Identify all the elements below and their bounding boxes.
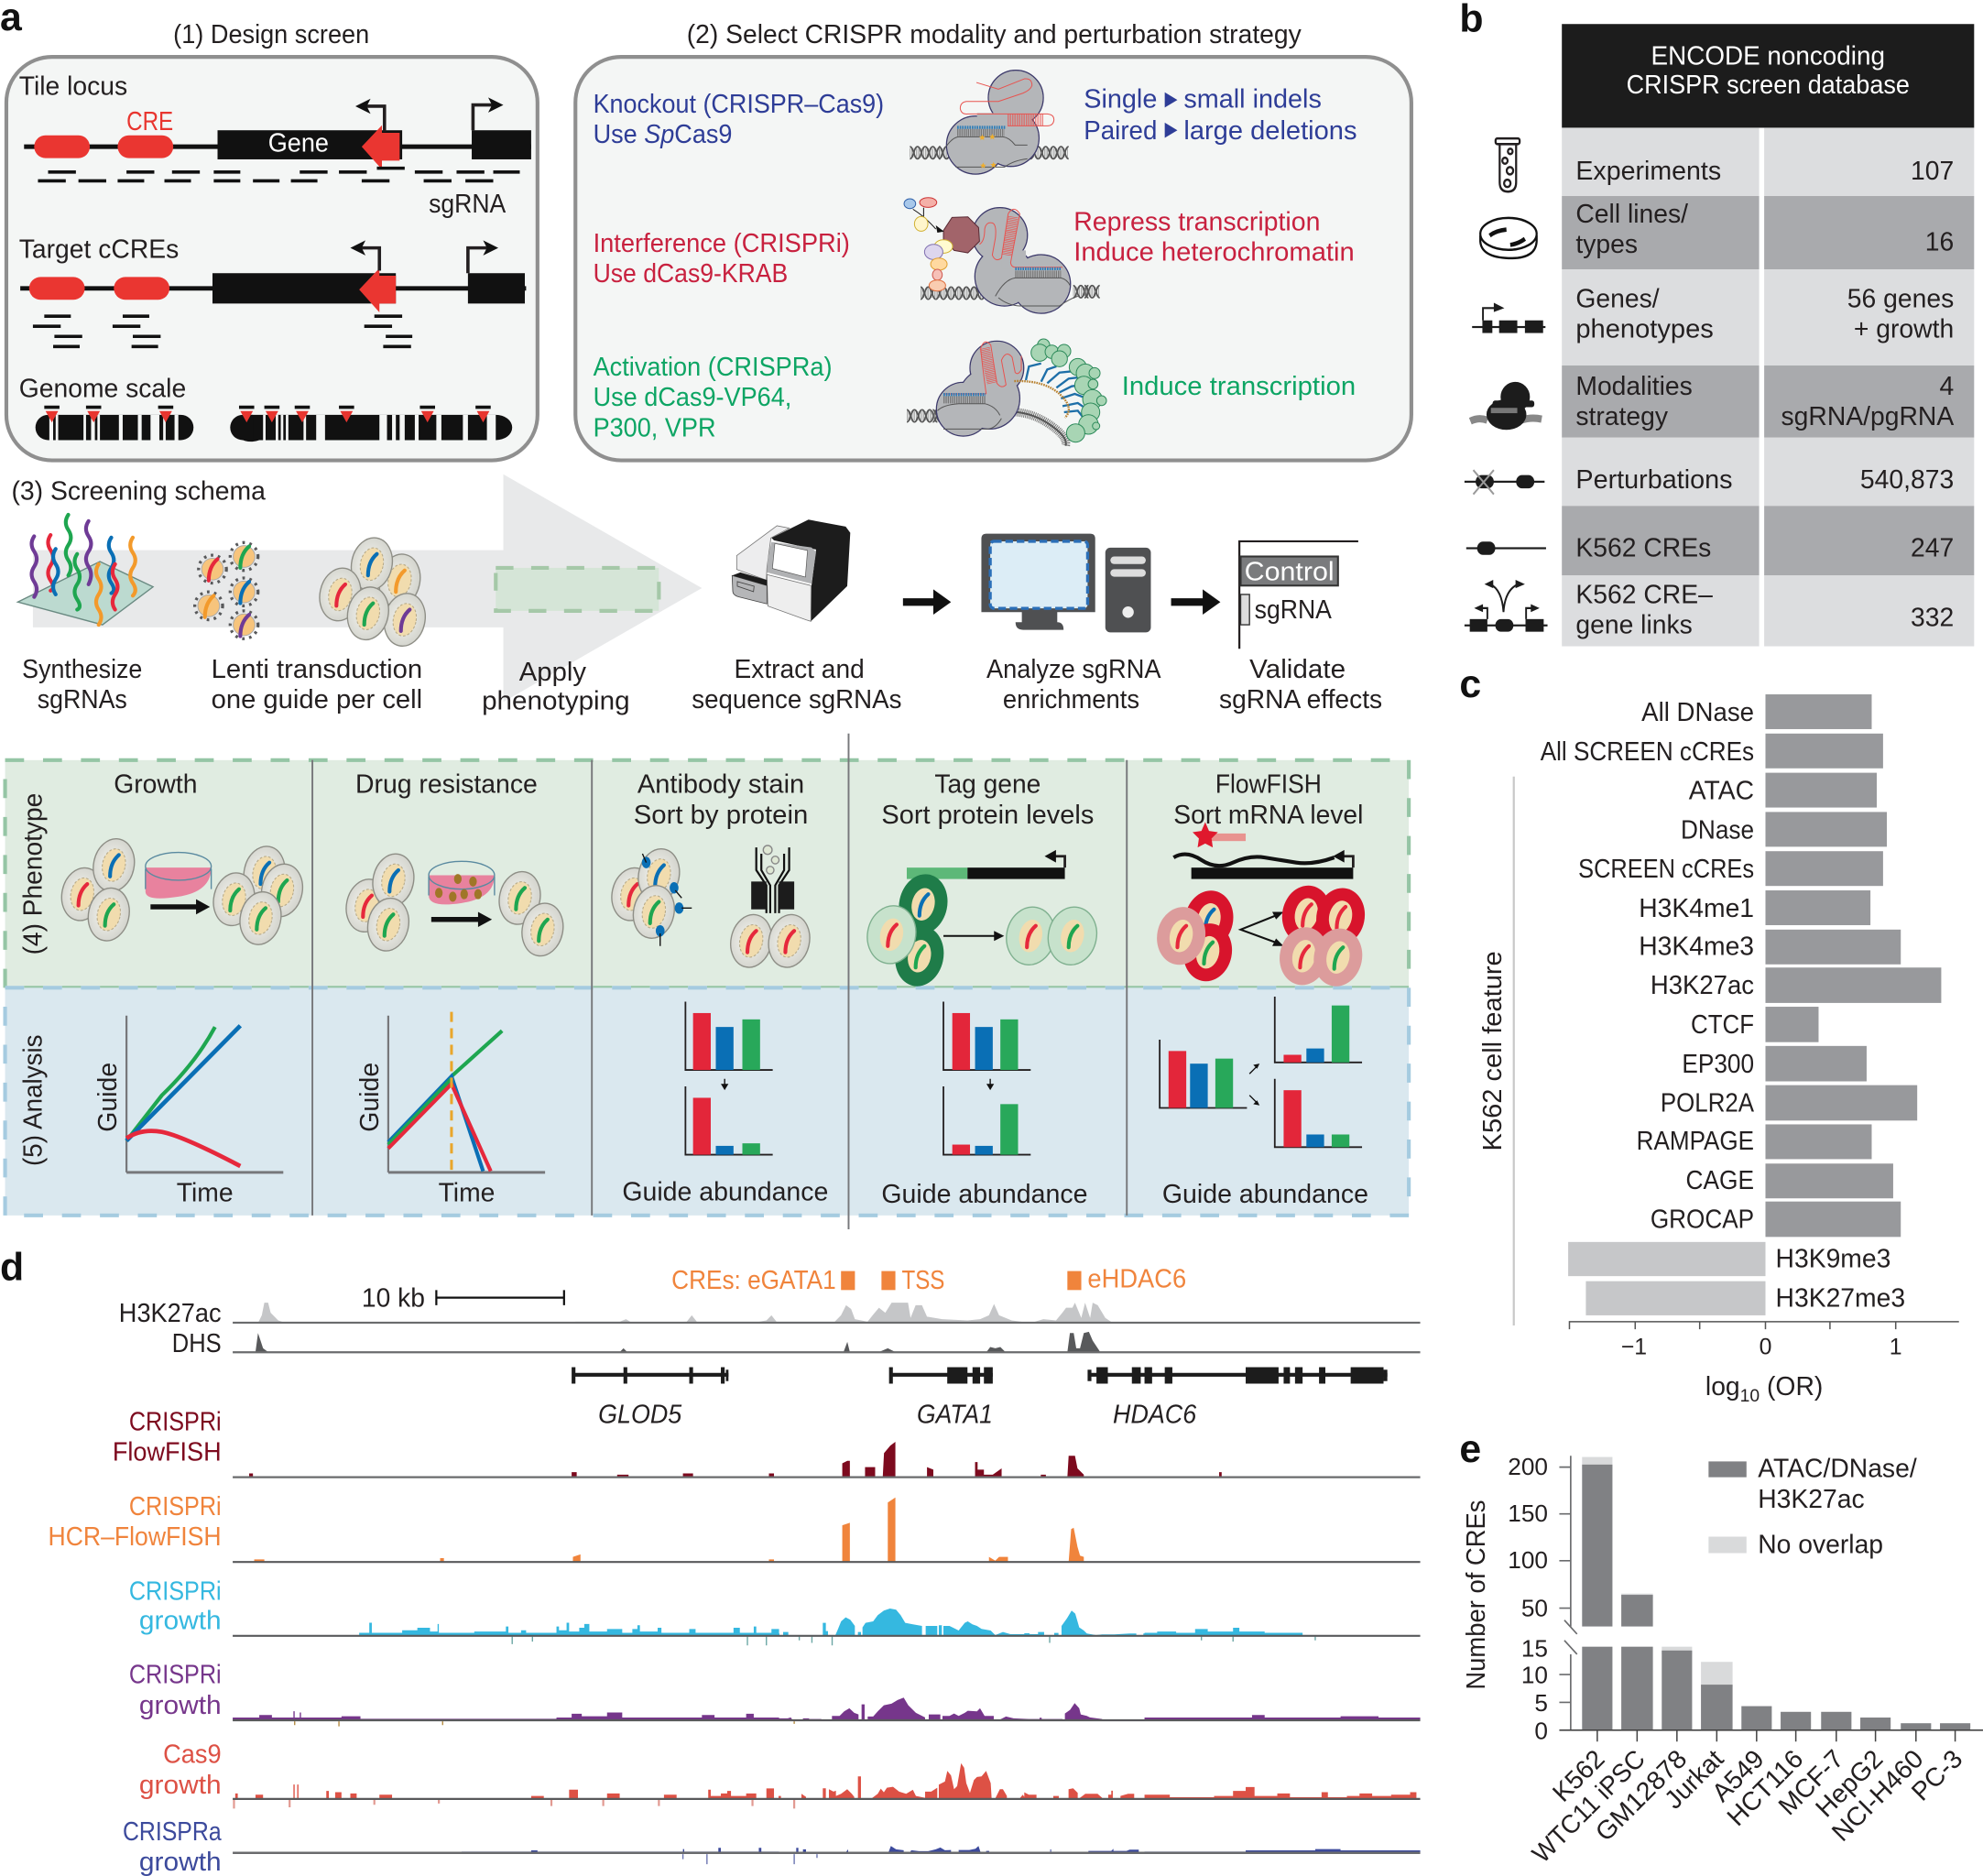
FlowFISH bar charts: Guide abundance [1162,1179,1368,1208]
knockout text: Knockout (CRISPR–Cas9) [594,89,884,118]
track: CRISPRi HCR-FlowFISH [48,1491,1421,1562]
target cCREs gene diagram [20,240,526,312]
gene GATA1 [889,1368,993,1383]
gene models: GLOD5 [598,1399,681,1428]
legend: No overlap [1758,1530,1883,1559]
icon: lentivirus particles [195,542,258,638]
sgRNA tiling dashes [38,169,519,180]
knockout Cas9 complex [910,71,1069,174]
gene models: GATA1 [917,1399,993,1428]
y tick labels: 0 [1534,1717,1548,1744]
icon: sequencer [732,519,850,621]
interference text: Interference (CRISPRi) [594,228,850,257]
target cCREs text: Target cCREs [19,234,179,264]
drug resistance analysis chart: Time [439,1178,495,1207]
genome scale text: Genome scale [19,374,186,403]
track: Cas9 growth: growth [139,1770,222,1799]
row: cell lines: types [1575,229,1638,258]
single paired text: Paired [1084,115,1157,145]
x axis [1559,1730,1983,1741]
feature labels: GROCAP [1651,1205,1754,1234]
icon: CRE [1466,541,1546,555]
FlowFISH bar charts [1160,997,1368,1208]
track: DHS [172,1328,1421,1358]
table header: ENCODE noncoding [1651,40,1885,70]
single paired text: large deletions [1183,115,1357,145]
row: K562 CREs: K562 CREs [1575,533,1711,562]
gene models: HDAC6 [1113,1399,1196,1428]
y-axis title: Number of CREs [1461,1500,1490,1690]
antibody bar charts [622,1002,828,1205]
CRE annotations [671,1264,1186,1294]
icon: CRE gene links [1465,580,1548,632]
row: genes: Genes/ [1575,284,1660,313]
panel label e: e [1459,1427,1481,1471]
panel label c: c [1459,662,1481,706]
y-axis grouping line [1513,777,1515,1325]
growth phenotype illustration [57,834,308,948]
validation chart: Control [1245,557,1335,586]
track: CRISPRi FlowFISH: FlowFISH [113,1437,222,1467]
row: experiments: Experiments [1575,156,1721,185]
step captions: Apply [519,657,587,686]
heading: design screen: (1) Design screen [173,19,369,49]
CRE annotations: eHDAC6 [1087,1264,1186,1293]
growth analysis chart [93,1016,283,1207]
row: CRE gene links [1562,575,1974,647]
scale bar [362,1282,564,1312]
row: cell lines [1562,196,1974,269]
track: CRISPRi HCR-FlowFISH: CRISPRi [129,1491,222,1521]
antibody sort illustration [607,845,814,971]
row label analysis: (5) Analysis [19,1034,49,1166]
big process arrow [33,474,702,702]
feature labels: CAGE [1686,1165,1754,1194]
growth analysis chart: Time [177,1178,234,1207]
x labels: NCI-H460 [1825,1744,1929,1847]
x labels: PC-3 [1905,1744,1968,1806]
row: CRE gene links: 332 [1911,602,1954,631]
table header [1562,24,1974,127]
FlowFISH illustration [1151,822,1370,991]
drug resistance analysis chart [355,1012,545,1207]
y tick labels: 100 [1508,1546,1548,1574]
row: cell lines: 16 [1925,226,1954,256]
activation text: Activation (CRISPRa) [594,352,833,381]
target sgRNA dashes [33,316,412,346]
activation text [594,352,833,442]
single paired text [1084,83,1357,145]
feature labels: All SCREEN cCREs [1541,736,1754,766]
column titles: Tag gene [934,769,1041,799]
negative labels: H3K27me3 [1776,1282,1905,1312]
feature labels: SCREEN cCREs [1578,854,1754,883]
row: cell lines: Cell lines/ [1575,199,1688,228]
CRE label: CRE [126,106,173,136]
column titles: Sort mRNA level [1173,800,1363,829]
track: CRISPRi growth purple: CRISPRi [129,1660,222,1689]
single paired text: small indels [1183,83,1322,113]
icon: Cas9 silhouette [1470,382,1542,430]
bar chart: number of CREs [1461,1453,1983,1868]
row: K562 CREs: 247 [1911,533,1954,562]
y tick labels: 5 [1534,1689,1548,1717]
row label phenotype: (4) Phenotype [19,793,49,954]
track: DHS: DHS [172,1328,222,1358]
track: CRISPRi growth purple: growth [139,1690,222,1719]
icon: test tube [1496,138,1520,191]
track: CRISPRi growth cyan: CRISPRi [129,1576,222,1606]
legend [1708,1454,1917,1559]
row: perturbations: 540,873 [1860,464,1954,494]
interference text [594,228,850,288]
feature labels: ATAC [1689,776,1754,805]
y tick labels: 50 [1521,1595,1548,1622]
row: modalities [1562,365,1974,438]
column titles: Sort by protein [634,800,808,829]
track: CRISPRa growth [123,1816,1421,1876]
track: CRISPRi HCR-FlowFISH: HCR–FlowFISH [48,1522,222,1551]
column titles: Antibody stain [637,769,804,799]
feature labels: RAMPAGE [1637,1126,1754,1155]
CRE annotations: TSS [901,1265,944,1294]
arrow to validate [1171,589,1220,615]
light no-overlap bars [1582,1457,1733,1687]
knockout text: Use SpCas9 [594,119,732,148]
track: CRISPRi FlowFISH: CRISPRi [129,1407,222,1436]
step captions: Synthesize [22,654,142,683]
step captions: Lenti transduction [212,654,422,683]
row: CRE gene links: gene links [1575,610,1693,639]
panel label d: d [0,1245,24,1289]
CRE annotations: CREs: eGATA1 [671,1265,836,1294]
track: CRISPRi FlowFISH [113,1407,1421,1478]
chromosomes with guide sites [36,408,512,442]
row: genes [1562,269,1974,365]
gene models [572,1368,1388,1428]
tile locus gene diagram: Gene [268,128,329,158]
panel: CRISPR modality [575,57,1411,461]
phenotyping placeholder box [496,568,659,611]
panel: design screen [6,57,538,461]
knockout text [594,89,884,148]
y tick labels [1508,1453,1548,1744]
validation chart [1239,541,1358,649]
track: CRISPRa growth: growth [139,1847,222,1876]
repress text [1073,206,1355,266]
feature labels: CTCF [1691,1009,1754,1039]
arrow to analysis [903,589,951,615]
heading: screening schema: (3) Screening schema [11,475,266,505]
step captions: phenotyping [482,686,630,715]
icon: computer [981,534,1150,632]
tag gene illustration [862,850,1102,991]
column titles: Drug resistance [355,769,538,799]
activation text: Use dCas9-VP64, [594,382,791,411]
column titles: Sort protein levels [881,800,1094,829]
x axis: 10 [1740,1387,1760,1406]
x axis: −1 [1621,1336,1647,1360]
row: modalities: 4 [1939,371,1954,400]
step captions: Extract and [735,654,865,683]
scale bar: 10 kb [362,1282,425,1312]
track: CRISPRi growth purple [129,1660,1421,1727]
legend: ATAC/DNase/ [1758,1454,1917,1483]
icon: gene model [1472,303,1545,333]
column titles [114,769,1363,829]
icon: transduced cells [315,534,430,649]
track: CRISPRi growth cyan [129,1576,1421,1645]
feature labels: H3K27ac [1651,970,1754,999]
growth analysis chart: Guide [93,1063,123,1132]
row: CRE gene links: K562 CRE– [1575,580,1713,609]
icon: sgRNA array slide [17,515,153,625]
single paired text: Single [1084,83,1157,113]
y-axis title: K562 cell feature [1477,951,1507,1151]
repress text: Induce heterochromatin [1073,236,1355,266]
tile locus text: Tile locus [19,71,127,101]
step captions: Validate [1249,654,1346,683]
row: experiments [1562,127,1974,196]
drug resistance analysis chart: Guide [355,1063,385,1132]
table header: CRISPR screen database [1627,70,1910,99]
legend: H3K27ac [1758,1484,1865,1513]
negative labels [1776,1243,1905,1312]
track: Cas9 growth: Cas9 [163,1740,222,1769]
interference text: Use dCas9-KRAB [594,258,788,288]
track: CRISPRa growth: CRISPRa [123,1816,222,1846]
x labels: WTC11 iPSC [1526,1744,1651,1868]
icon: perturbed CRE [1465,470,1544,495]
panel: analysis band [5,987,1409,1216]
row: K562 CREs [1562,506,1974,575]
column titles: Growth [114,769,197,799]
activation text: P300, VPR [594,412,716,442]
x labels: GM12878 [1589,1744,1693,1847]
x labels: MCF-7 [1772,1744,1849,1820]
dark overlap bars [1582,1465,1970,1730]
table: ENCODE database [1562,24,1974,647]
row: perturbations: Perturbations [1575,464,1733,494]
feature labels: EP300 [1682,1049,1754,1078]
feature labels: All DNase [1641,697,1754,726]
negative bars [1568,1242,1765,1315]
row: genes: + growth [1854,314,1954,344]
x axis: 0 [1760,1336,1771,1360]
track: H3K27ac: H3K27ac [119,1298,222,1327]
column titles: FlowFISH [1215,769,1322,799]
x labels [1526,1743,1968,1868]
row: genes: phenotypes [1575,314,1714,344]
row: modalities: Modalities [1575,371,1693,400]
icon: petri dish [1480,218,1537,258]
row: perturbations [1562,438,1974,506]
x axis: 1 [1890,1336,1902,1360]
step captions [22,654,1382,715]
x labels: HepG2 [1809,1744,1889,1823]
CRISPRi complex [904,198,1100,313]
y axis with break [1559,1456,1577,1730]
y tick labels: 200 [1508,1453,1548,1480]
track: Cas9 growth [139,1740,1421,1808]
step captions: sequence sgRNAs [692,684,901,714]
step captions: sgRNAs [38,684,127,714]
antibody bar charts: Guide abundance [622,1176,828,1205]
drug resistance illustration [342,850,568,960]
activate text: Induce transcription [1122,371,1356,400]
negative labels: H3K9me3 [1776,1243,1890,1272]
panel: phenotype band [5,760,1409,987]
gene GLOD5 [572,1368,728,1383]
x labels: HCT116 [1721,1744,1809,1831]
x labels: A549 [1705,1744,1770,1807]
validation chart: sgRNA [1255,594,1332,624]
row: genes: 56 genes [1847,284,1954,313]
repress text: Repress transcription [1073,206,1320,235]
x axis [1569,1322,1959,1406]
tag gene bar charts [881,1002,1087,1208]
x labels: K562 [1546,1744,1610,1807]
heading: select CRISPR modality: (2) Select CRISPR modality and perturbation strategy [687,19,1302,49]
step captions: sgRNA effects [1219,684,1382,714]
y tick labels: 150 [1508,1500,1548,1527]
y tick labels: 15 [1521,1635,1548,1663]
x axis: (OR) [1760,1371,1823,1401]
x labels: Jurkat [1658,1743,1729,1815]
feature labels: H3K4me3 [1639,931,1754,960]
track: H3K27ac [119,1298,1421,1327]
track: CRISPRi growth cyan: growth [139,1605,222,1634]
x axis: log [1705,1371,1740,1401]
bar chart: K562 cell feature enrichment [1477,694,1959,1406]
step captions: Analyze sgRNA [986,654,1161,683]
row: modalities: sgRNA/pgRNA [1781,401,1954,431]
step captions: enrichments [1003,684,1139,714]
feature labels: DNase [1681,814,1754,844]
sgRNA label: sgRNA [429,189,506,218]
CRISPRa complex [907,339,1106,446]
positive bars [1765,694,1941,1237]
row: modalities: strategy [1575,401,1669,431]
gene HDAC6 [1087,1368,1388,1383]
feature labels: H3K4me1 [1639,893,1754,922]
feature labels: POLR2A [1661,1088,1754,1118]
tag gene bar charts: Guide abundance [881,1179,1087,1208]
row: experiments: 107 [1911,156,1954,185]
y tick labels: 10 [1521,1662,1548,1689]
tile locus gene diagram [24,97,531,169]
feature labels [1541,697,1754,1234]
step captions: one guide per cell [212,684,422,714]
